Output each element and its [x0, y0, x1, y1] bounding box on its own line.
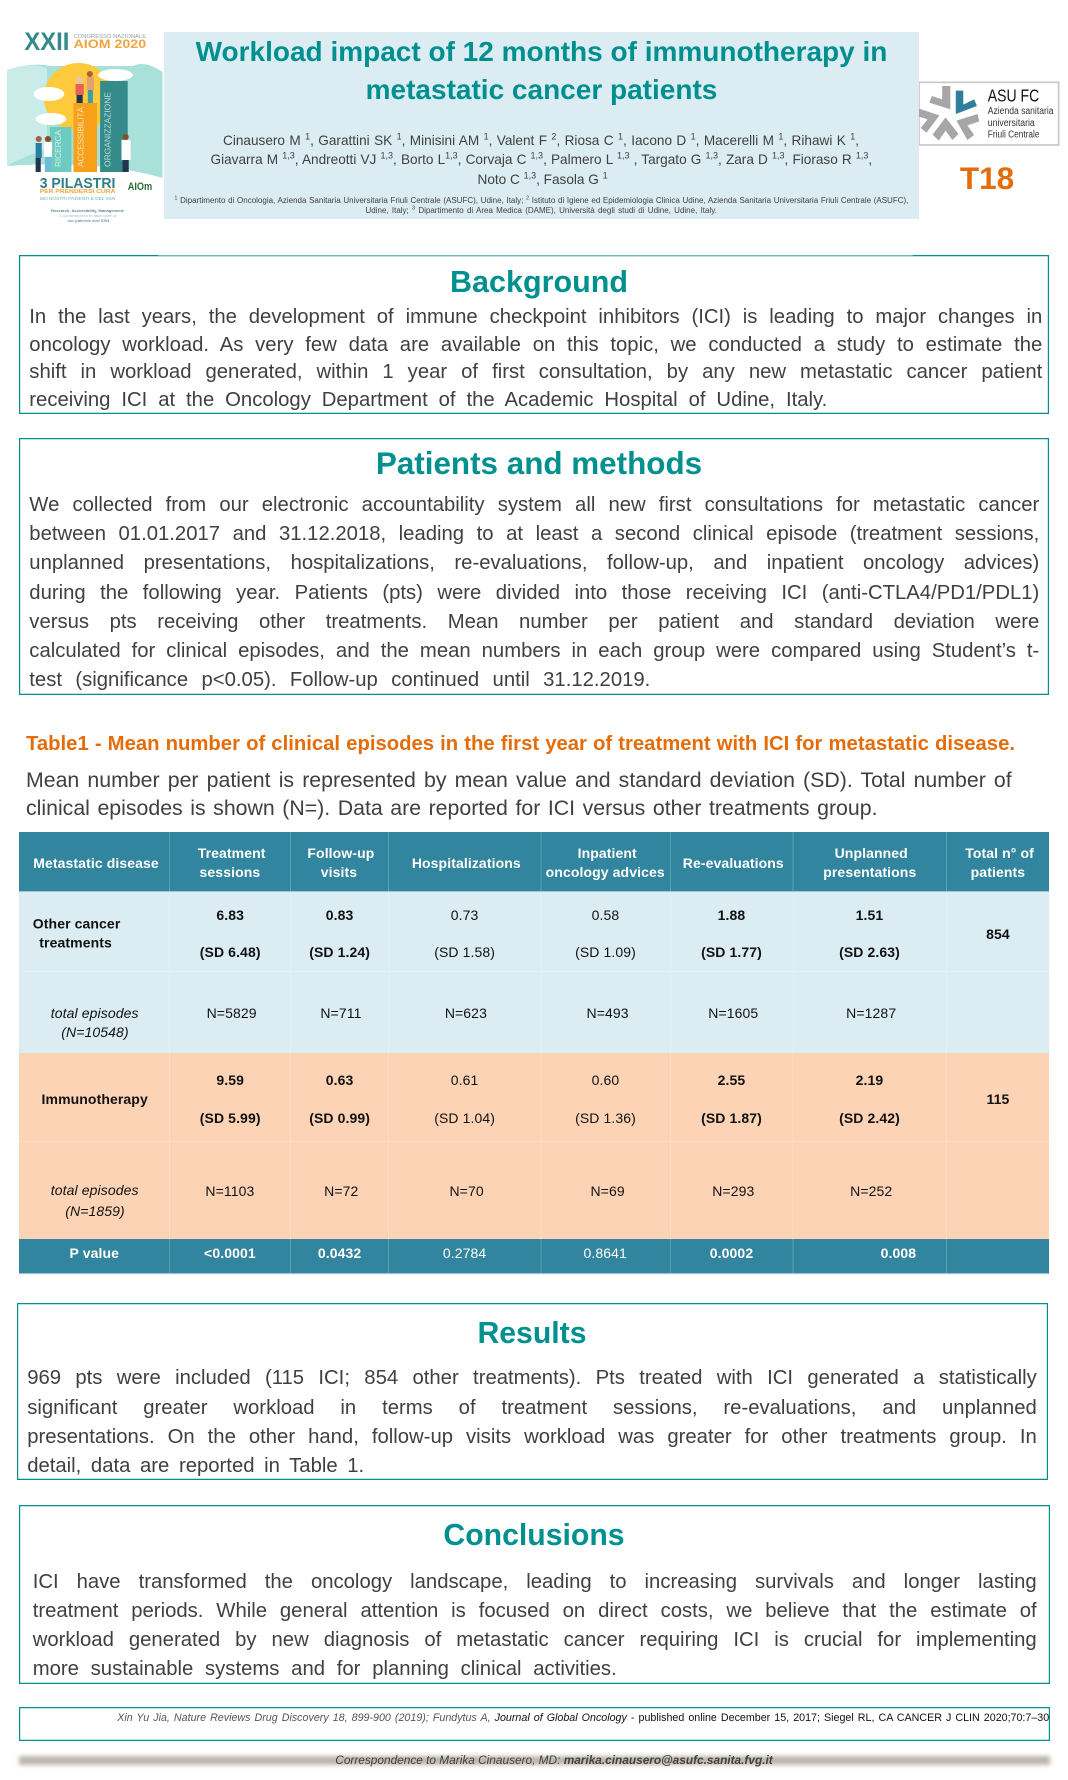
- table header row: Total n° of: [965, 845, 1034, 861]
- table row: other cancer treatments: (SD 1.24): [309, 944, 370, 960]
- logo: AIOM 2020 congress: ORGANIZZAZIONE: [102, 92, 112, 167]
- table row: p values: 0.008: [881, 1245, 916, 1261]
- panel: results: [17, 1303, 1048, 1480]
- table header row: Treatment: [198, 845, 266, 861]
- table row: other cancer treatments: 1.88: [718, 907, 745, 923]
- table row: other treatments total episodes: total episodes: [51, 1005, 139, 1021]
- table row: immunotherapy: 0.60: [592, 1072, 619, 1088]
- logo: ASU FC: universitaria: [988, 118, 1035, 129]
- table heading: [26, 733, 1015, 820]
- table row: other cancer treatments: (SD 1.58): [434, 944, 495, 960]
- correspondence bar: [16, 1753, 1052, 1768]
- methods text: [29, 494, 1039, 691]
- background text: shift in workload generated, within 1 year of first consultation, by any new metastatic cancer patient: [29, 361, 1042, 383]
- table row: other treatments total episodes: N=623: [445, 1005, 487, 1021]
- affiliations: Udine, Italy; 3 Dipartimento di Area Medica (DAME), Università degli studi di Udine, Udine, Italy.: [365, 205, 717, 215]
- table row: other treatments total episodes: [51, 1005, 896, 1040]
- table row: other cancer treatments: treatments: [39, 934, 112, 950]
- table row: immunotherapy total episodes: N=293: [712, 1183, 754, 1199]
- table row: immunotherapy: [42, 1072, 1009, 1126]
- logo: AIOM 2020 congress: AIOm: [128, 181, 152, 193]
- methods text: between 01.01.2017 and 31.12.2018, leading to at least a second clinical episode (treatment sessions,: [29, 523, 1039, 545]
- table row: other treatments total episodes: (N=10548): [61, 1024, 129, 1040]
- table row: other cancer treatments: 6.83: [216, 907, 244, 923]
- logo: AIOM 2020 congress: our patients and SSN: [67, 218, 109, 223]
- table row: immunotherapy: 115: [986, 1091, 1009, 1107]
- table row: other cancer treatments: (SD 1.77): [701, 944, 762, 960]
- table row: immunotherapy total episodes: N=72: [324, 1183, 359, 1199]
- table row: other treatments total episodes: N=1287: [846, 1005, 896, 1021]
- table row: immunotherapy: (SD 1.36): [575, 1110, 636, 1126]
- methods text: versus pts receiving other treatments. Mean number per patient and standard deviation were: [29, 611, 1039, 633]
- logo: ASU FC: ASU FC: [988, 86, 1039, 105]
- references text: Xin Yu Jia, Nature Reviews Drug Discovery 18, 899-900 (2019); Fundytus A, Journal of Global Oncology - published online December 15, 2017; Siegel RL, CA CANCER J CLIN 2020;70:7–30: [117, 1712, 1049, 1724]
- results text: presentations. On the other hand, follow-up visits workload was greater for other treatments group. In: [27, 1426, 1037, 1448]
- table row: p values: 0.0002: [710, 1245, 753, 1261]
- table row: other treatments total episodes: N=1605: [708, 1005, 758, 1021]
- table row: other cancer treatments: (SD 6.48): [200, 944, 261, 960]
- table header row: visits: [321, 864, 357, 880]
- table: clinical episodes: [19, 832, 1049, 1274]
- table row: immunotherapy: 2.55: [718, 1072, 745, 1088]
- title: [196, 36, 887, 105]
- table row: other cancer treatments: (SD 2.63): [839, 944, 900, 960]
- logo: AIOM 2020 congress: AIOM 2020: [73, 37, 146, 51]
- authors: [210, 131, 872, 187]
- results text: [27, 1367, 1037, 1477]
- table header row: Inpatient: [578, 845, 637, 861]
- logo: AIOM 2020 congress: PER PRENDERSI CURA: [40, 189, 115, 195]
- logo: ASU FC: Friuli Centrale: [988, 129, 1040, 140]
- table description: [26, 768, 1012, 820]
- results text: detail, data are reported in Table 1.: [27, 1455, 364, 1477]
- results text: significant greater workload in terms of treatment sessions, re-evaluations, and unplanned: [27, 1397, 1037, 1419]
- table row: immunotherapy: (SD 1.04): [434, 1110, 495, 1126]
- table header row: Hospitalizations: [412, 855, 521, 871]
- table header row: sessions: [200, 864, 260, 880]
- table row: other treatments total episodes: N=493: [587, 1005, 629, 1021]
- table row: p values: P value: [70, 1245, 119, 1261]
- table row: immunotherapy total episodes: N=1103: [205, 1183, 255, 1199]
- table header row: patients: [971, 864, 1025, 880]
- affiliations: [174, 195, 908, 215]
- heading: results: Results: [477, 1317, 587, 1350]
- table description: clinical episodes is shown (N=). Data are reported for ICI versus other treatments group.: [26, 796, 878, 820]
- table row: immunotherapy: 0.63: [326, 1072, 354, 1088]
- table header row: presentations: [823, 864, 916, 880]
- table row: immunotherapy: Immunotherapy: [42, 1091, 148, 1107]
- heading: conclusions: Conclusions: [443, 1519, 625, 1552]
- table row: other cancer treatments: 854: [986, 926, 1010, 942]
- table row: immunotherapy: 9.59: [216, 1072, 244, 1088]
- correspondence text: Correspondence to Marika Cinausero, MD: marika.cinausero@asufc.sanita.fvg.it: [335, 1753, 773, 1767]
- table header row: [33, 845, 1034, 880]
- logo: ASU FC: [919, 82, 1060, 146]
- table row: p values: 0.0432: [318, 1245, 361, 1261]
- panel: conclusions: [19, 1505, 1050, 1684]
- table row: other cancer treatments: [33, 907, 1010, 960]
- logo: AIOM 2020 congress: CONGRESSO NAZIONALE: [73, 34, 147, 40]
- table row: p values: 0.2784: [443, 1245, 486, 1261]
- logo: AIOM 2020 congress: DEI NOSTRI PAZIENTI E DEL SSN: [40, 196, 115, 201]
- logo: AIOM 2020 congress: 3 PILASTRI: [40, 176, 115, 192]
- results text: 969 pts were included (115 ICI; 854 other treatments). Pts treated with ICI generated a statistically: [27, 1367, 1037, 1389]
- logo: AIOM 2020 congress: Research, Accessibility, Management:: [51, 208, 125, 213]
- table row: immunotherapy: 0.61: [451, 1072, 479, 1088]
- logo: AIOM 2020 congress: ACCESSIBILITÀ: [76, 107, 86, 167]
- table row: other treatments total episodes: N=5829: [207, 1005, 257, 1021]
- table title: Table1 - Mean number of clinical episodes in the first year of treatment with ICI for metastatic disease.: [26, 733, 1015, 755]
- table row: immunotherapy total episodes: N=70: [449, 1183, 484, 1199]
- background text: [29, 306, 1042, 411]
- table row: other treatments total episodes: N=711: [320, 1005, 362, 1021]
- table row: immunotherapy: (SD 2.42): [839, 1110, 900, 1126]
- authors: Noto C 1,3, Fasola G 1: [478, 170, 608, 187]
- authors: Giavarra M 1,3, Andreotti VJ 1,3, Borto L1,3, Corvaja C 1,3, Palmero L 1,3 , Targato G 1,3, Zara D 1,3, Fioraso R 1,3,: [210, 150, 872, 167]
- panel: background: [19, 255, 1049, 414]
- table header row: Metastatic disease: [33, 855, 159, 871]
- methods text: unplanned presentations, hospitalizations, re-evaluations, follow-up, and inpatient oncology advices): [29, 552, 1039, 574]
- logo: AIOM 2020 congress: XXII: [24, 28, 69, 56]
- table row: other cancer treatments: 0.73: [451, 907, 479, 923]
- poster code T18: T18: [960, 160, 1014, 196]
- methods text: We collected from our electronic accountability system all new first consultations for metastatic cancer: [29, 494, 1039, 516]
- background text: In the last years, the development of immune checkpoint inhibitors (ICI) is leading to major changes in: [29, 306, 1042, 328]
- authors: Cinausero M 1, Garattini SK 1, Minisini AM 1, Valent F 2, Riosa C 1, Iacono D 1, Macerelli M 1, Rihawi K 1,: [223, 131, 859, 148]
- conclusions text: ICI have transformed the oncology landscape, leading to increasing survivals and longer lasting: [33, 1571, 1037, 1593]
- panel: title and authors: [164, 32, 919, 219]
- heading: patients and methods: Patients and methods: [376, 446, 702, 481]
- table row: p values: 0.8641: [583, 1245, 627, 1261]
- logo: AIOM 2020 congress: 3 cornerstones to take care of: [59, 213, 117, 218]
- table row: immunotherapy: (SD 1.87): [701, 1110, 762, 1126]
- conclusions text: [32, 1571, 1037, 1680]
- conclusions text: treatment periods. While general attention is focused on direct costs, we believe that the estimate of: [33, 1600, 1037, 1622]
- table row: p values: [70, 1245, 916, 1261]
- heading: background: Background: [450, 265, 628, 299]
- logo: AIOM 2020 congress: RICERCA: [53, 130, 63, 167]
- table header row: Unplanned: [835, 845, 908, 861]
- table header row: Re-evaluations: [683, 855, 784, 871]
- conclusions text: more sustainable systems and for planning clinical activities.: [33, 1658, 617, 1680]
- methods text: calculated for clinical episodes, and the mean numbers in each group were compared using Student’s t-: [29, 640, 1039, 662]
- title: metastatic cancer patients: [366, 74, 717, 104]
- table row: immunotherapy: 2.19: [856, 1072, 883, 1088]
- methods text: during the following year. Patients (pts) were divided into those receiving ICI (anti-CTLA4/PD1/PDL1): [29, 582, 1039, 604]
- panel: references: [19, 1707, 1050, 1741]
- table row: immunotherapy: (SD 5.99): [200, 1110, 261, 1126]
- table header row: oncology advices: [546, 864, 665, 880]
- table row: immunotherapy total episodes: (N=1859): [65, 1203, 125, 1219]
- table row: p values: <0.0001: [204, 1245, 256, 1261]
- table row: immunotherapy total episodes: [51, 1182, 892, 1219]
- methods text: test (significance p<0.05). Follow-up continued until 31.12.2019.: [29, 669, 650, 691]
- table row: immunotherapy total episodes: total episodes: [51, 1182, 139, 1198]
- affiliations: 1 Dipartimento di Oncologia, Azienda Sanitaria Universitaria Friuli Centrale (ASUFC), Udine, Italy; 2 Istituto di Igiene ed Epidemiologia Clinica Udine, Azienda Sanitaria Universitaria Friuli Centrale (ASUFC),: [174, 195, 908, 205]
- conclusions text: workload generated by new diagnosis of metastatic cancer requiring ICI is crucial for implementing: [33, 1629, 1037, 1651]
- panel: patients and methods: [19, 438, 1049, 695]
- table row: immunotherapy total episodes: N=252: [850, 1183, 892, 1199]
- table row: other cancer treatments: 0.58: [592, 907, 619, 923]
- background text: receiving ICI at the Oncology Department of the Academic Hospital of Udine, Italy.: [29, 389, 827, 411]
- table header row: Follow-up: [307, 845, 374, 861]
- shadow bar: [19, 1756, 1050, 1765]
- background text: oncology workload. As very few data are available on this topic, we conducted a study to estimate the: [29, 334, 1042, 356]
- table row: immunotherapy total episodes: N=69: [590, 1183, 625, 1199]
- title: Workload impact of 12 months of immunotherapy in: [196, 36, 887, 66]
- table row: other cancer treatments: 0.83: [326, 907, 354, 923]
- table row: other cancer treatments: (SD 1.09): [575, 944, 636, 960]
- logo: AIOM 2020 congress: [7, 28, 162, 223]
- table row: other cancer treatments: 1.51: [856, 907, 883, 923]
- table description: Mean number per patient is represented by mean value and standard deviation (SD). Total number of: [26, 768, 1012, 792]
- table row: other cancer treatments: Other cancer: [33, 916, 121, 932]
- table row: immunotherapy: (SD 0.99): [309, 1110, 370, 1126]
